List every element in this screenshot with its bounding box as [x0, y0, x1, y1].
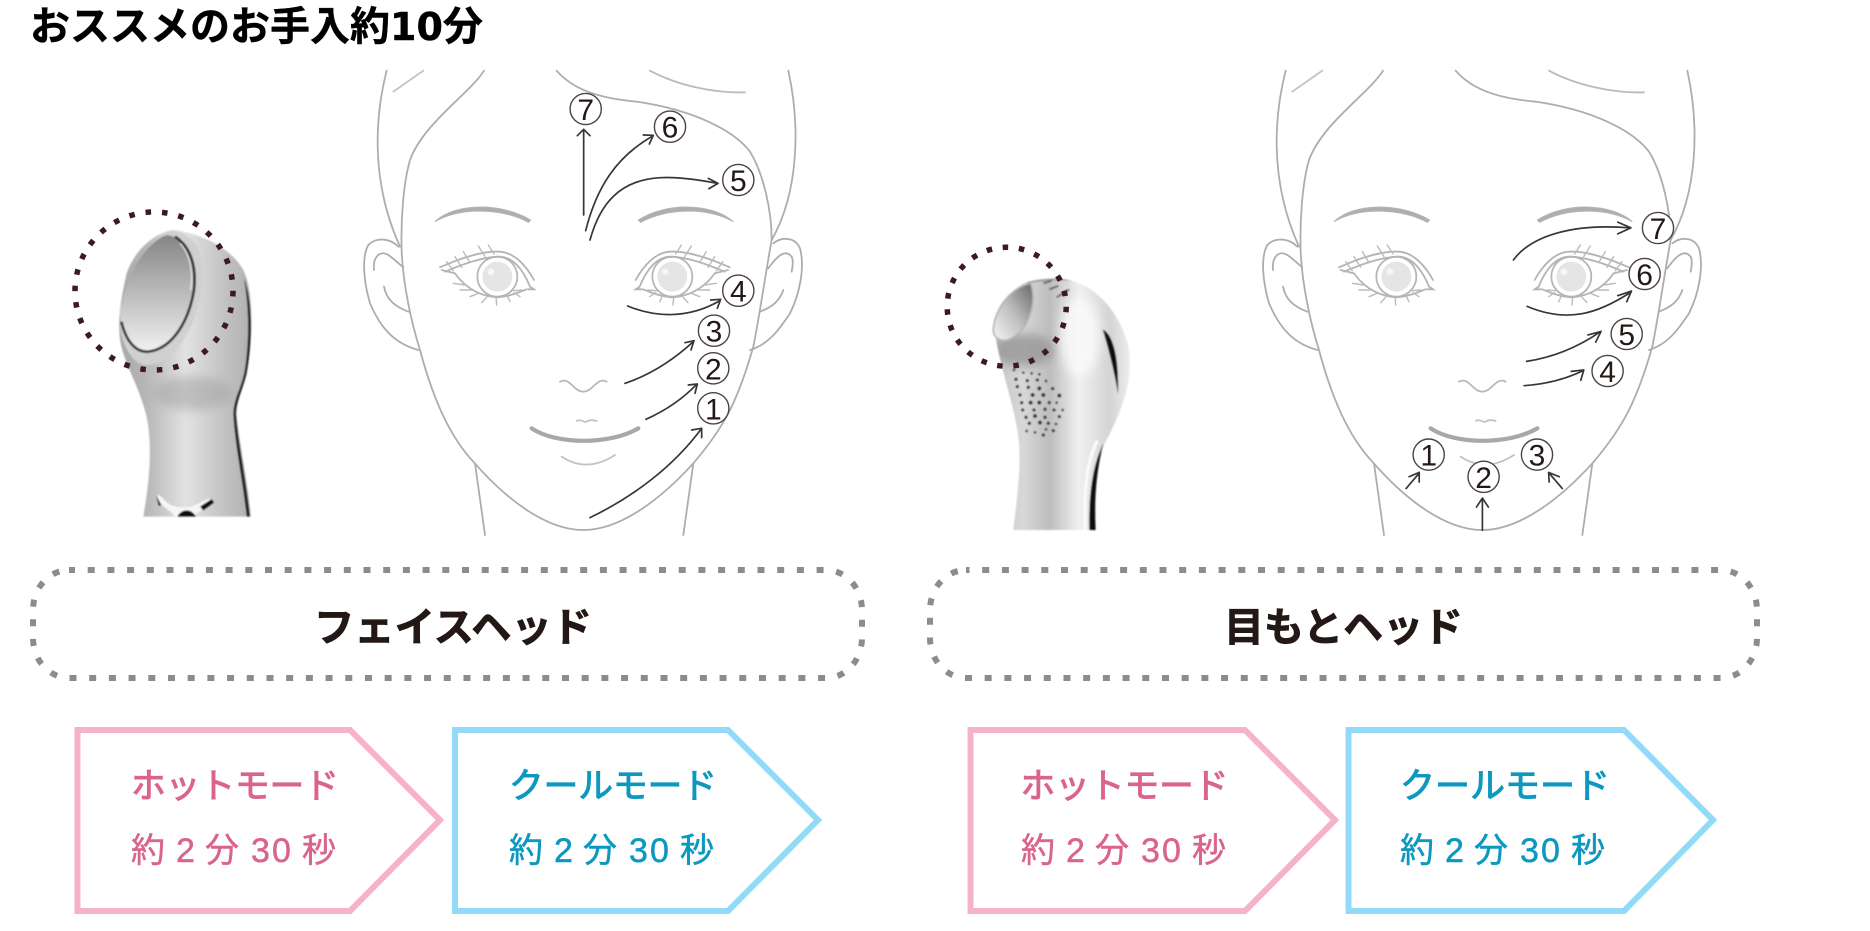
step: cool mode, eye head	[1348, 730, 1713, 911]
face illustration: right panel	[1263, 71, 1701, 535]
heading pill: eye head	[930, 570, 1757, 678]
step numbers: eye head: 5	[1618, 319, 1635, 352]
dotted circle: eye head highlight	[947, 247, 1066, 366]
step numbers: eye head	[1413, 212, 1674, 495]
step: cool mode, eye head: クールモード	[1400, 767, 1610, 806]
dotted circle: face head highlight	[75, 212, 233, 370]
arrows: face massage direction	[577, 129, 721, 518]
heading pill: face head	[33, 570, 862, 678]
step: hot mode, eye head: 約2分30秒	[1021, 832, 1226, 870]
step numbers: face head: 7	[577, 94, 594, 127]
step numbers: eye head: 3	[1529, 440, 1545, 473]
step numbers: eye head: 1	[1420, 440, 1437, 473]
step numbers: eye head: 4	[1599, 356, 1616, 389]
step numbers: face head	[570, 93, 754, 426]
step numbers: face head: 1	[705, 393, 722, 426]
step: hot mode, eye head: ホットモード	[1020, 767, 1228, 806]
step: cool mode, face head: 約2分30秒	[509, 832, 714, 870]
step: cool mode, face head	[455, 730, 818, 911]
heading pill: face head: フェイスヘッド	[314, 606, 592, 650]
step: cool mode, face head: クールモード	[509, 767, 717, 806]
arrows: eye massage direction	[1406, 222, 1631, 530]
title: おススメのお手入約10分	[30, 5, 483, 49]
step: hot mode, face head: 約2分30秒	[131, 832, 336, 870]
step numbers: face head: 6	[662, 112, 678, 145]
step numbers: face head: 2	[705, 353, 722, 386]
panel: face head	[33, 71, 862, 911]
product: eye head device	[993, 278, 1130, 530]
step numbers: eye head: 7	[1650, 213, 1666, 246]
step numbers: face head: 4	[730, 276, 747, 309]
product: face head device	[119, 230, 251, 517]
step numbers: face head: 3	[706, 316, 722, 349]
step numbers: eye head: 2	[1475, 462, 1492, 495]
panel: eye head	[930, 71, 1757, 911]
step: cool mode, eye head: 約2分30秒	[1400, 832, 1605, 870]
step: hot mode, face head: ホットモード	[131, 767, 339, 806]
step: hot mode, face head	[78, 730, 440, 911]
step numbers: eye head: 6	[1636, 259, 1653, 292]
step: hot mode, eye head	[970, 730, 1335, 911]
heading pill: eye head: 目もとヘッド	[1224, 606, 1463, 650]
step numbers: face head: 5	[730, 165, 747, 198]
face illustration: left panel	[364, 71, 802, 535]
